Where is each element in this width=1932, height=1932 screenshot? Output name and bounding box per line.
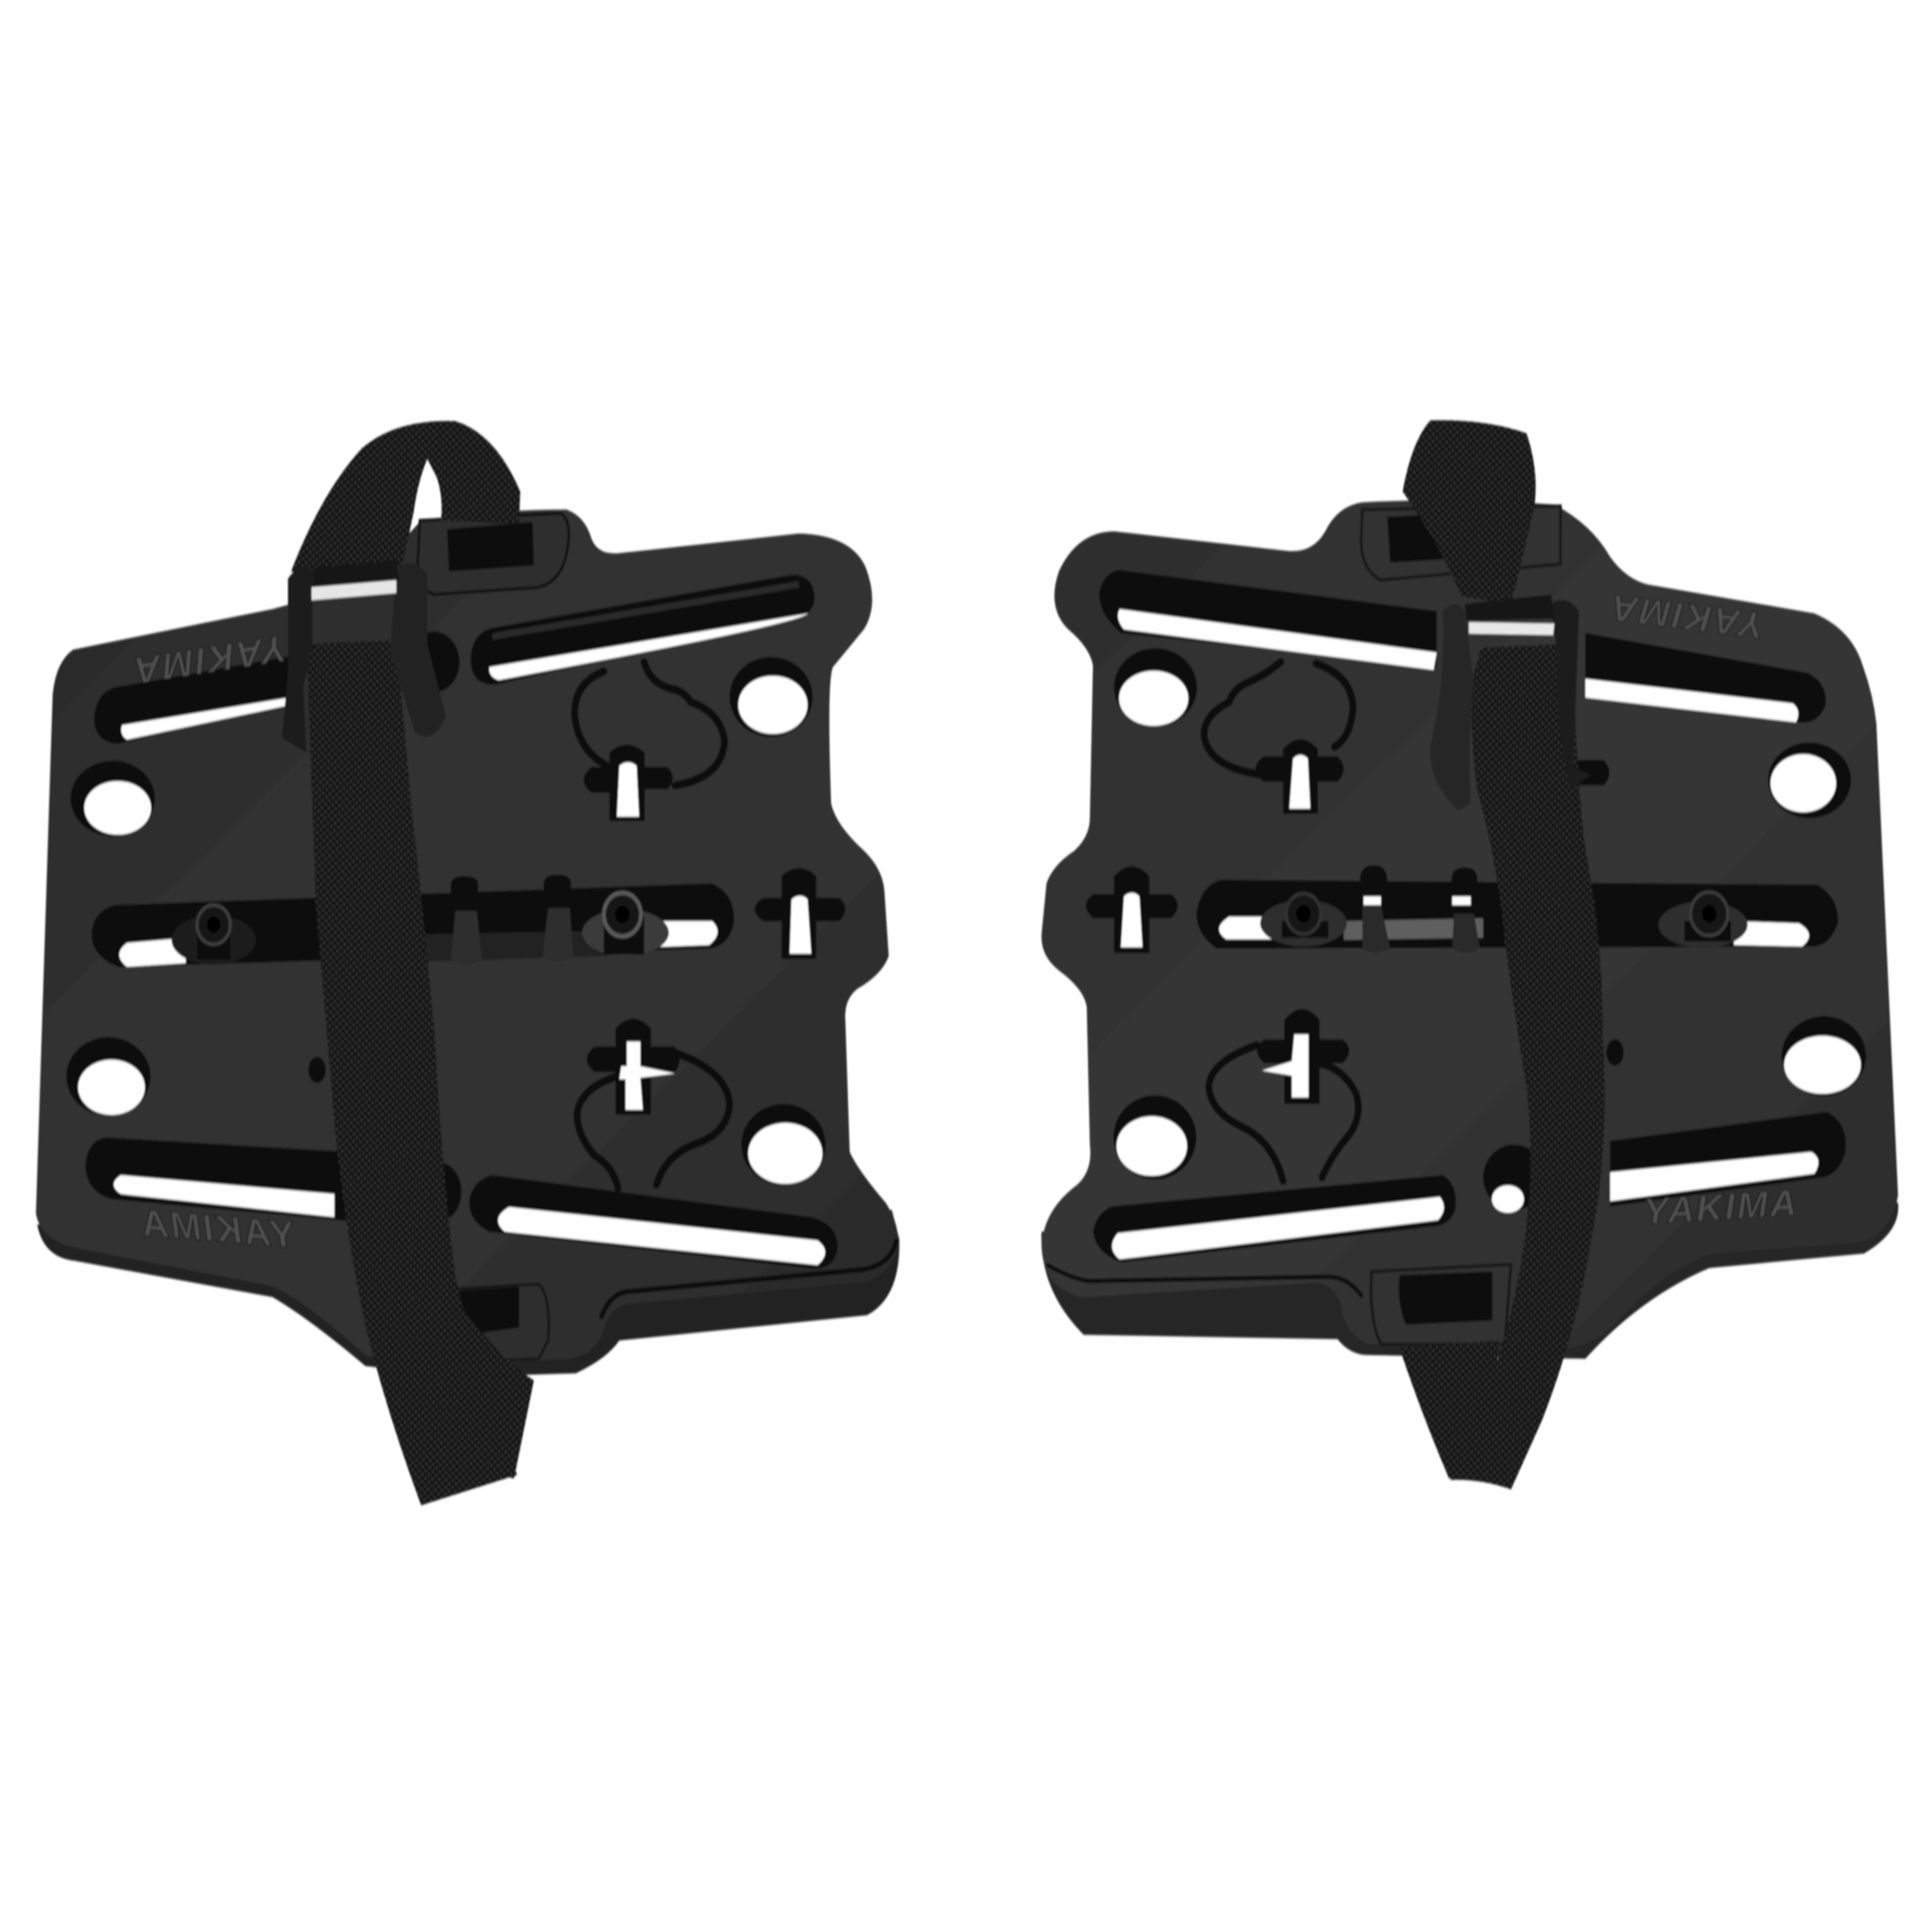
strip tiny openings [1363,897,1470,905]
buckle [282,560,446,753]
right plate rim line [1046,1265,1362,1297]
slot: top right [1586,633,1826,723]
left plate lower edge thickness [37,1210,899,1377]
hole behind buckle [407,631,460,693]
strap main band [1450,644,1604,1489]
hole upper left [1114,648,1197,727]
hole upper right [1768,743,1851,818]
keyhole: top [575,662,725,785]
opening [113,1175,335,1217]
cross slot: bottom [1257,1009,1349,1104]
bolt left [1260,894,1347,946]
bolt right [582,893,669,956]
opening right [650,921,718,947]
left plate body [36,509,898,1366]
strap tail behind plate [1400,1340,1498,1478]
left mounting plate [36,421,899,1505]
right plate lower edge thickness [1041,1202,1898,1359]
slot: top right [471,575,814,685]
keyhole: bottom [577,1054,730,1188]
opening [489,614,808,680]
slot: top left [1099,570,1437,670]
slot: bottom right [1610,1112,1846,1206]
strap upper loop [1403,420,1536,604]
buckle [1431,595,1591,811]
keyhole: top [1204,662,1353,774]
bottom tab slot [455,1287,519,1337]
opening left [119,938,186,967]
opening [1586,679,1798,722]
hole upper left [70,760,155,836]
keyhole: bottom [1209,1045,1358,1180]
hole behind strap [1483,1145,1545,1210]
slot: bottom left [1093,1175,1455,1262]
right mounting plate [1041,420,1898,1489]
round holes [1113,648,1865,1213]
top tab slot [447,522,534,571]
hole lower left [67,1037,151,1116]
logo upside down, top right: YAKIMA [1607,587,1765,647]
slot: bottom right [470,1175,837,1269]
round holes [67,631,826,1221]
adjuster strip [421,930,607,962]
opening [1118,609,1437,670]
cross slot: top [584,745,673,821]
hole lower right [1782,1017,1865,1096]
slot: bottom left [85,1138,346,1221]
hole behind strap [418,1163,462,1221]
logo mirrored, bottom left: YAKIMA [139,1201,296,1256]
opening [121,696,297,740]
slot: top left [94,655,297,744]
logo, bottom right: YAKIMA [1643,1181,1799,1232]
hole upper right [730,657,812,737]
right plate body [1041,500,1898,1349]
small pin hole [309,1056,326,1083]
slot: middle with bolts [91,875,734,967]
hole lower right [742,1104,826,1185]
bottom tab slot [1399,1272,1492,1324]
bolt left [172,905,256,965]
bottom strap tab [1371,1265,1511,1344]
buckle metal bar [1469,622,1555,635]
opening [498,1207,825,1265]
strap upper loop [291,421,520,579]
opening [1610,1152,1819,1201]
bottom strap tab [446,1284,549,1362]
adjuster strip [1344,918,1483,940]
strip cross notches [451,875,571,905]
buckle metal bar [312,580,396,601]
cross slot: bottom [587,1019,680,1115]
slot: middle with bolts [1196,865,1838,953]
opening left [1219,916,1282,939]
logo upside down, top left: YAKIMA [130,627,289,692]
hole lower left [1113,1095,1196,1179]
strap tail behind plate [427,1294,534,1485]
bolt right [1658,893,1747,948]
opening [1112,1197,1444,1259]
opening right [1734,921,1809,946]
cross slot: right hidden by buckle [1570,760,1609,785]
cross slot: right [755,868,845,959]
cross slot: top [1256,740,1344,814]
small pin hole [1606,1039,1623,1065]
strip notches [1360,865,1477,897]
left plate rim highlight [601,1239,897,1318]
top tab slot [1387,513,1461,563]
top strap tab [1361,506,1561,580]
strap main band [307,640,517,1505]
top strap tab [418,513,569,595]
cross slot: left [1086,867,1177,953]
